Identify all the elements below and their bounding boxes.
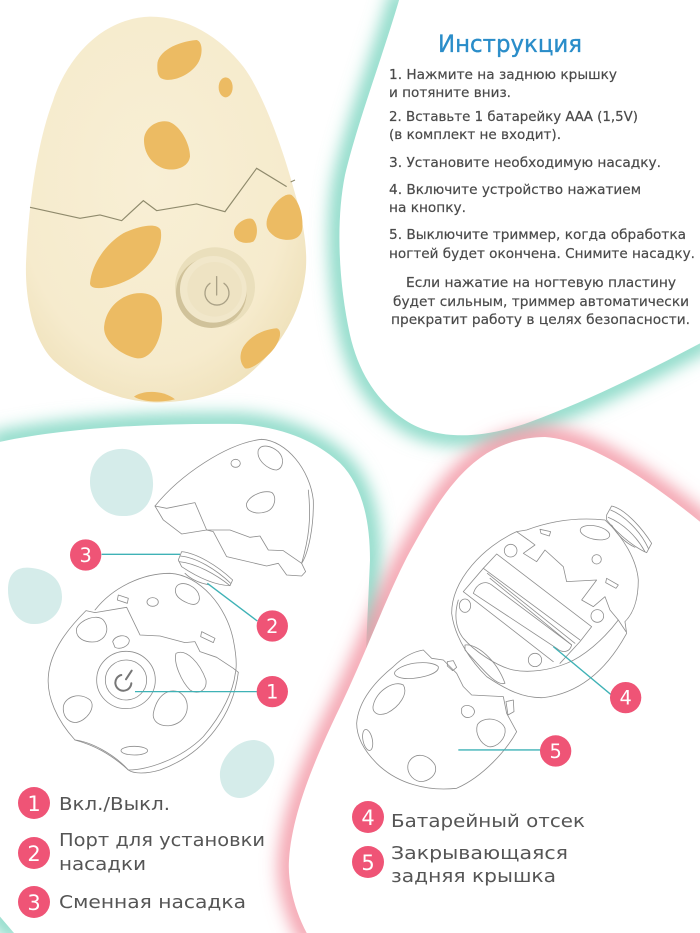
- instructions text: будет сильным, триммер автоматически: [393, 294, 689, 310]
- diagram: front view: [48, 439, 313, 773]
- legend item 2: насадки: [59, 854, 146, 875]
- legend: front view: [18, 787, 265, 918]
- legend item 1: 1: [27, 792, 41, 816]
- legend item 3: 3: [27, 891, 41, 915]
- instructions text: 4. Включите устройство нажатием: [389, 182, 641, 198]
- instructions text: 5. Выключите триммер, когда обработка: [389, 227, 686, 243]
- legend item 2: Порт для установки: [59, 830, 265, 851]
- decorative teal blobs: [8, 449, 274, 798]
- instructions text: прекратит работу в целях безопасности.: [391, 312, 690, 328]
- background glow: pink: [289, 437, 700, 933]
- instructions text: 1. Нажмите на заднюю крышку: [389, 67, 617, 83]
- callout 4: [553, 647, 641, 713]
- legend item 5: 5: [361, 851, 375, 875]
- legend item 5: [352, 843, 568, 887]
- title: Инструкция: [438, 30, 582, 58]
- instructions text: (в комплект не входит).: [389, 127, 561, 143]
- icon: power symbol: [115, 671, 132, 691]
- callout 4: 4: [619, 687, 632, 710]
- egg body: [26, 17, 306, 403]
- callout 1: 1: [266, 681, 278, 704]
- callout 2: [207, 583, 288, 642]
- panel: front diagram background: [0, 424, 370, 933]
- legend item 4: 4: [361, 806, 375, 830]
- product photo: egg trimmer: [26, 17, 306, 403]
- legend: back view: [352, 801, 585, 887]
- callout 5: [458, 735, 571, 767]
- legend item 2: 2: [27, 842, 41, 866]
- instructions text: и потяните вниз.: [389, 85, 511, 101]
- power button outline: [97, 651, 155, 709]
- callout 3: [70, 539, 180, 571]
- legend item 4: Батарейный отсек: [391, 811, 585, 832]
- callout 3: 3: [80, 544, 92, 567]
- power button: [175, 247, 255, 328]
- panel: back diagram background: [289, 437, 700, 933]
- callout 2: 2: [266, 615, 278, 638]
- top shell: [155, 439, 313, 576]
- diagram: back view: [357, 506, 652, 789]
- instructions text: Если нажатие на ногтевую пластину: [406, 275, 676, 291]
- legend item 3: [18, 886, 246, 918]
- legend item 4: [352, 801, 585, 833]
- instructions text: на кнопку.: [389, 200, 466, 216]
- egg spots: [90, 40, 302, 402]
- crack line: [30, 168, 295, 221]
- legend item 1: [18, 787, 170, 819]
- nozzle: [178, 552, 233, 586]
- legend item 5: Закрывающаяся: [391, 843, 568, 864]
- instructions text: [389, 67, 695, 328]
- callout 5: 5: [549, 740, 562, 763]
- legend item 3: Сменная насадка: [59, 892, 246, 913]
- legend item 1: Вкл./Выкл.: [59, 794, 170, 815]
- instructions text: 3. Установите необходимую насадку.: [389, 155, 661, 171]
- opened body with battery compartment: [452, 506, 652, 698]
- legend item 5: задняя крышка: [391, 866, 556, 887]
- removed back cover: [357, 650, 517, 789]
- instructions text: 2. Вставьте 1 батарейку ААА (1,5V): [389, 109, 638, 125]
- instructions text: ногтей будет окончена. Снимите насадку.: [389, 246, 695, 262]
- legend item 2: [18, 830, 265, 875]
- panel: instructions background: [339, 0, 700, 435]
- callout 1: [135, 676, 288, 707]
- icon: power symbol: [205, 277, 229, 305]
- lower body: [48, 573, 238, 773]
